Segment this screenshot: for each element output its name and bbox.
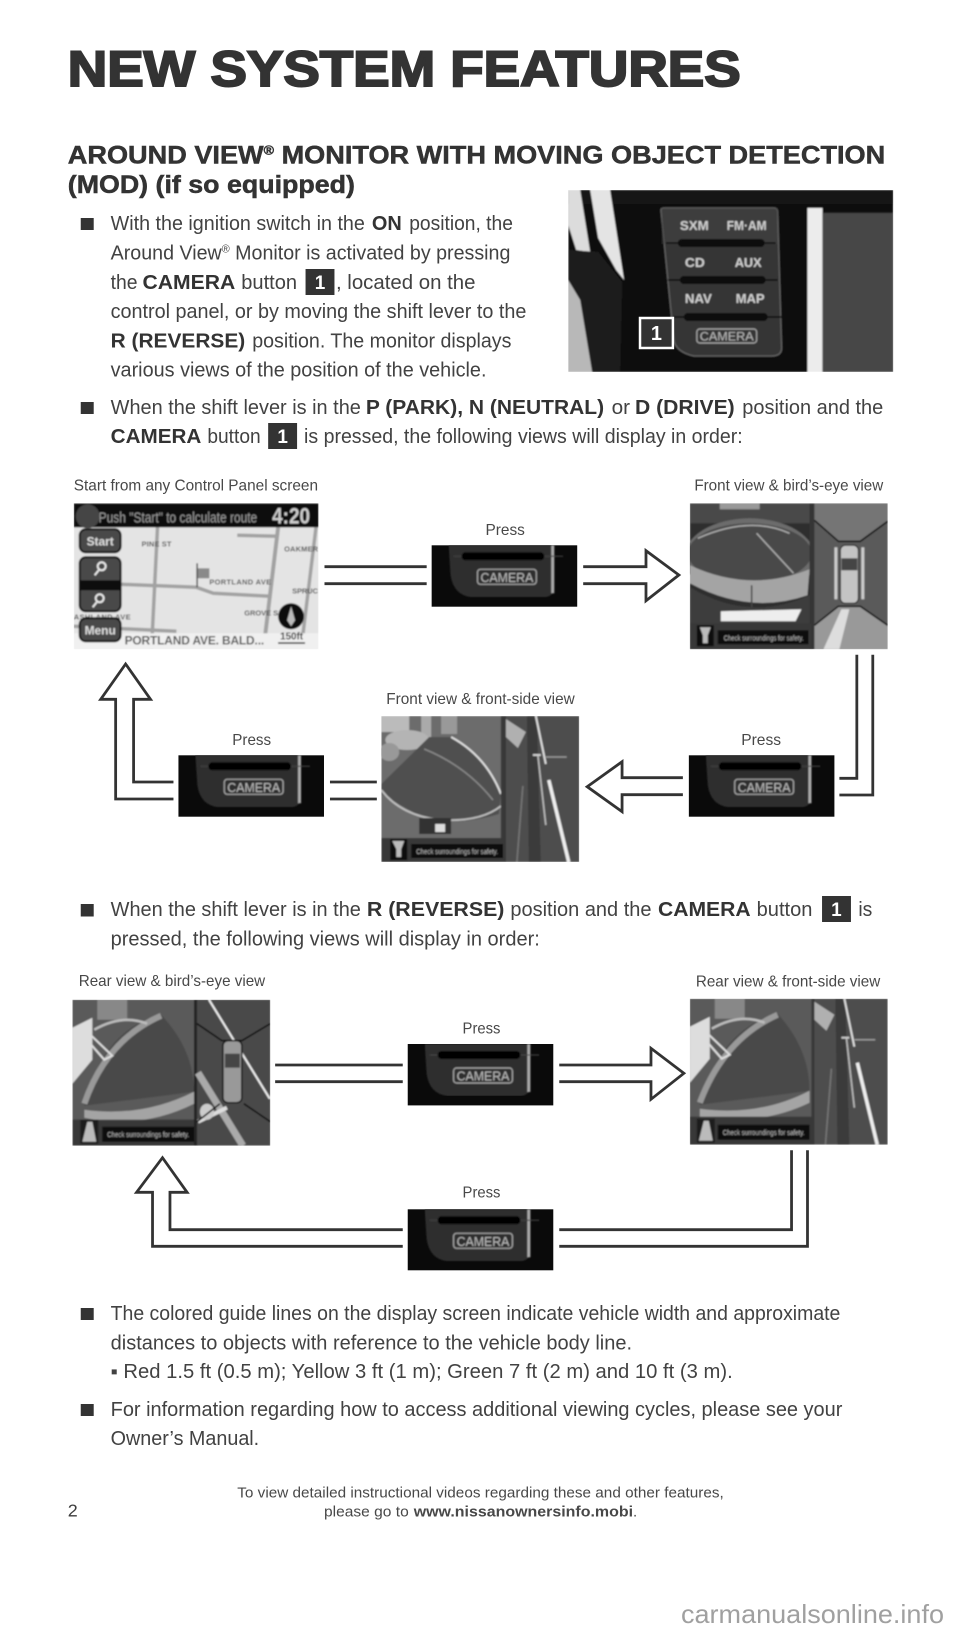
camera button 2 [178, 755, 324, 817]
bullet: ignition switch paragraph: button [241, 272, 297, 294]
title: NEW SYSTEM FEATURES [68, 41, 741, 97]
screen: navigation map: PORTLAND AVE. BALD... [125, 633, 264, 647]
screen: navigation map: SPRUC [292, 586, 319, 595]
footer note: . [633, 1504, 637, 1521]
photo: control panel buttons with callout 1: AUX [735, 255, 762, 270]
arrow: back up to map [101, 664, 377, 799]
bullet: reverse paragraph: When the shift lever is in the [111, 899, 361, 921]
bullet: ignition switch paragraph: position, the [409, 213, 513, 235]
bullet: reverse paragraph: 1 [831, 900, 842, 921]
bullet: reverse paragraph: button [757, 899, 812, 921]
section heading: AROUND VIEW [68, 141, 248, 169]
label: press: Press [232, 732, 271, 749]
footer note: To view detailed instructional videos regarding these and other features, [237, 1484, 724, 1501]
bullet: ignition switch paragraph: ® [222, 243, 230, 255]
footer note: please go to [324, 1504, 409, 1521]
bullet: guide lines paragraph: distances to objects with reference to the vehicle body line. [111, 1332, 632, 1354]
bullet: ignition switch paragraph: various views of the position of the vehicle. [111, 360, 486, 382]
bullet: ignition switch paragraph: 1 [315, 273, 326, 294]
screen: navigation map: Menu [85, 623, 116, 637]
bullet: park neutral drive paragraph: position and the [742, 397, 883, 419]
screen: front view and bird's-eye view: Check surroundings for safety. [724, 635, 804, 642]
label: rear and front-side: Rear view & front-side view [696, 974, 881, 991]
bullet: guide lines paragraph [81, 1303, 840, 1383]
camera button 2: CAMERA [227, 780, 280, 795]
screen: navigation map: Start [87, 534, 114, 548]
bullet: reverse paragraph: R (REVERSE) [367, 899, 504, 921]
section heading: MONITOR WITH MOVING OBJECT DETECTION [274, 141, 885, 169]
bullet: reverse paragraph: is [858, 899, 872, 921]
bullet: ignition switch paragraph: position. The monitor displays [252, 331, 511, 353]
label: front and front-side: Front view & front-side view [386, 691, 576, 708]
camera button 3: CAMERA [738, 780, 791, 795]
bullet: owner's manual paragraph: For information regarding how to access additional viewing cycles, please see your [111, 1399, 843, 1421]
bullet: ignition switch paragraph: ON [372, 213, 402, 235]
bullet: guide lines paragraph: The colored guide lines on the display screen indicate vehicle width and approximate [111, 1303, 840, 1325]
bullet: ignition switch paragraph: R (REVERSE) [111, 331, 245, 353]
screen: navigation map: GROVE S [244, 608, 278, 617]
bullet: reverse paragraph: pressed, the following views will display in order: [111, 929, 540, 951]
page number: 2 [68, 1501, 78, 1521]
bullet: reverse paragraph: position and the [510, 899, 651, 921]
screen: front view and front-side view: Check surroundings for safety. [416, 849, 498, 856]
label: press: Press [463, 1020, 501, 1037]
label: press: Press [463, 1184, 501, 1201]
bullet: guide lines paragraph: ▪ Red 1.5 ft (0.5 m); Yellow 3 ft (1 m); Green 7 ft (2 m) and 10 ft (3 m). [111, 1361, 733, 1383]
photo: control panel buttons with callout 1: MAP [736, 291, 765, 306]
screen: navigation map: OAKMER [284, 544, 319, 553]
screen: rear view and bird's-eye view: Check surroundings for safety. [107, 1132, 189, 1139]
bullet: ignition switch paragraph: , located on the [336, 272, 476, 294]
screen: navigation map: 150ft [280, 631, 304, 642]
photo: control panel buttons with callout 1: CAMERA [700, 329, 754, 344]
bullet: park neutral drive paragraph: CAMERA [111, 426, 201, 448]
screen: navigation map: ASHLAND AVE [74, 612, 131, 621]
bullet: park neutral drive paragraph: D (DRIVE) [635, 397, 735, 419]
bullet: park neutral drive paragraph: 1 [277, 427, 288, 448]
photo: control panel buttons with callout 1: SXM [680, 218, 709, 233]
camera button 1 [432, 545, 577, 607]
bullet: ignition switch paragraph: control panel, or by moving the shift lever to the [111, 301, 526, 323]
bullet: park neutral drive paragraph: button [207, 426, 261, 448]
footer note: www.nissanownersinfo.mobi [413, 1504, 633, 1521]
label: rear and bird's-eye: Rear view & bird’s-eye view [79, 973, 266, 990]
bullet: ignition switch paragraph: the [111, 272, 138, 294]
bullet: reverse paragraph [81, 896, 872, 951]
bullet: ignition switch paragraph: Monitor is activated by pressing [230, 242, 510, 264]
photo: control panel buttons with callout 1: FM·AM [727, 218, 767, 233]
bullet: owner's manual paragraph [81, 1399, 843, 1450]
bullet: reverse paragraph: CAMERA [658, 899, 751, 921]
section heading: ® [264, 142, 275, 157]
bullet: park neutral drive paragraph: When the shift lever is in the [111, 397, 361, 419]
bullet: owner's manual paragraph: Owner’s Manual. [111, 1428, 259, 1450]
screen: navigation map [74, 503, 319, 649]
camera button 5: CAMERA [457, 1234, 510, 1249]
watermark: carmanualsonline.info [681, 1599, 944, 1629]
screen: rear view and front-side view: Check surroundings for safety. [723, 1130, 805, 1137]
screen: navigation map: PORTLAND AVE [209, 577, 271, 586]
label: front and bird's-eye: Front view & bird’s-eye view [694, 478, 884, 495]
screen: rear view and bird's-eye view [72, 1000, 270, 1146]
bullet: ignition switch paragraph: CAMERA [143, 272, 235, 294]
screen: navigation map: Push "Start" to calculate route [99, 509, 257, 526]
photo: control panel buttons with callout 1 [568, 190, 893, 372]
bullet: park neutral drive paragraph: or [612, 397, 630, 419]
bullet: ignition switch paragraph: With the ignition switch in the [111, 213, 365, 235]
photo: control panel buttons with callout 1: CD [685, 255, 705, 270]
bullet: park neutral drive paragraph: P (PARK), N (NEUTRAL) [366, 397, 604, 419]
camera button 1: CAMERA [481, 570, 534, 585]
screen: front view and front-side view [379, 716, 579, 862]
footer note [237, 1484, 724, 1521]
screen: navigation map: 4:20 [272, 503, 310, 528]
screen: front view and bird's-eye view [684, 503, 888, 649]
bullet: ignition switch paragraph [81, 213, 526, 382]
arrow: back to rear bird's-eye [137, 1150, 807, 1246]
arrow: down from front view [839, 655, 873, 795]
camera button 4: CAMERA [457, 1068, 510, 1084]
label: start screen: Start from any Control Panel screen [74, 478, 318, 495]
arrow: to front-side view [587, 762, 683, 812]
photo: control panel buttons with callout 1: NAV [685, 291, 712, 306]
section heading: (MOD) (if so equipped) [68, 171, 355, 199]
camera button 4 [408, 1044, 553, 1105]
label: press: Press [485, 522, 525, 539]
camera button 5 [408, 1209, 553, 1270]
screen: rear view and front-side view [690, 999, 888, 1145]
bullet: park neutral drive paragraph [81, 397, 883, 449]
callout badge: 1 [640, 318, 673, 348]
label: press: Press [741, 732, 781, 749]
camera button 3 [689, 755, 834, 817]
arrow: rear bird's-eye to rear front-side [275, 1048, 684, 1099]
screen: navigation map: PINE ST [142, 539, 172, 548]
section heading [68, 141, 885, 199]
bullet: park neutral drive paragraph: is pressed, the following views will display in order: [304, 426, 743, 448]
bullet: ignition switch paragraph: Around View [111, 242, 223, 264]
callout badge: 1: 1 [651, 323, 662, 345]
arrow: map to front view [324, 551, 679, 601]
